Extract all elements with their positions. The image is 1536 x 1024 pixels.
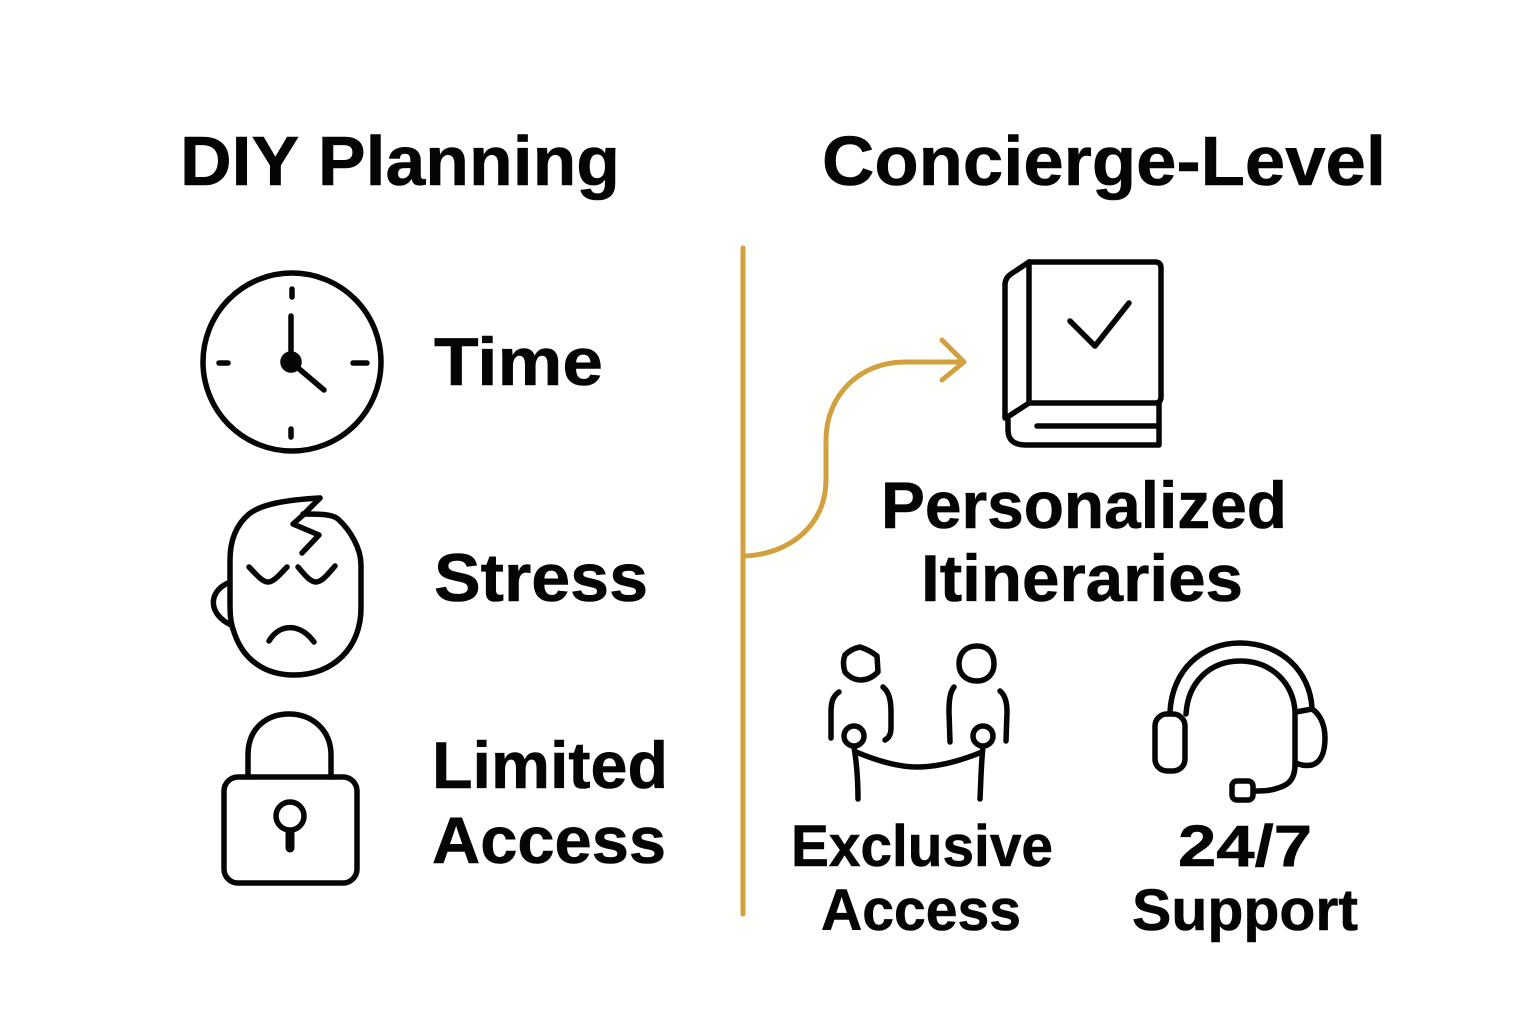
label: Exclusive Access: Exclusive <box>791 814 1053 879</box>
label: Exclusive Access <box>791 814 1053 943</box>
icon: headset <box>1155 643 1325 800</box>
label: Personalized Itineraries: Personalized <box>881 468 1287 542</box>
label: Personalized Itineraries <box>881 468 1287 615</box>
label: Limited Access <box>432 728 668 877</box>
heading: DIY Planning: DIY Planning <box>180 122 620 200</box>
label: 24/7 Support: Support <box>1132 878 1358 943</box>
icon: clock <box>203 273 381 451</box>
label: 24/7 Support <box>1132 814 1358 943</box>
label: Stress: Stress <box>434 540 648 616</box>
label: Limited Access: Limited <box>432 728 668 802</box>
label: Limited Access: Access <box>432 803 666 877</box>
icon: padlock <box>224 714 357 883</box>
divider line <box>740 248 746 914</box>
heading: Concierge-Level: Concierge-Level <box>822 122 1386 200</box>
label: Personalized Itineraries: Itineraries <box>921 541 1243 615</box>
icon: book with check <box>1005 262 1161 445</box>
arrow: curved connector <box>745 340 964 556</box>
icon: stressed face <box>213 498 361 675</box>
icon: two people with rope barrier <box>831 646 1007 799</box>
label: Time: Time <box>434 324 603 400</box>
label: Exclusive Access: Access <box>821 878 1021 943</box>
label: 24/7 Support: 24/7 <box>1178 814 1312 879</box>
